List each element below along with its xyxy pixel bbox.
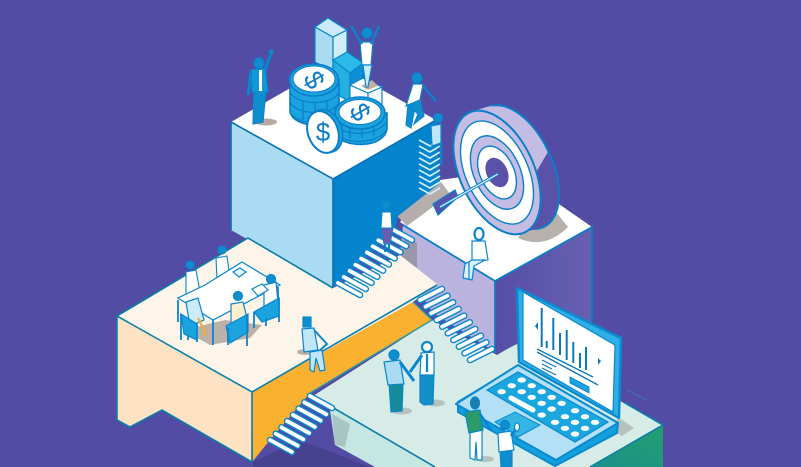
person: waving on top xyxy=(248,50,277,126)
keyboard xyxy=(487,372,608,442)
person: seated on middle cube xyxy=(463,228,488,280)
coin stack: left: $ xyxy=(297,66,331,94)
person: right at table xyxy=(252,274,279,328)
isometric illustration xyxy=(116,17,664,467)
laptop xyxy=(456,288,634,466)
shadow below lower stairs xyxy=(253,440,370,467)
ladder on blue cube xyxy=(419,140,440,194)
person: climbing top edge xyxy=(406,73,436,128)
coin stack: right: $ xyxy=(343,98,377,126)
stairs: upper xyxy=(338,228,412,295)
person: handshake right xyxy=(410,342,445,406)
person: seated on platform edge xyxy=(297,317,327,372)
panel: green side face xyxy=(591,426,663,467)
meeting table group xyxy=(178,246,280,346)
keys xyxy=(498,377,599,437)
trackpad xyxy=(495,412,540,437)
coin standing: $ xyxy=(316,117,331,147)
person: top at table xyxy=(216,246,230,280)
bar: tall xyxy=(315,18,347,72)
person: woman on stairs xyxy=(381,201,393,252)
person: front centre at table xyxy=(226,292,248,346)
space bar xyxy=(511,398,533,410)
table xyxy=(178,262,280,345)
screen text lines and button xyxy=(535,322,601,393)
screen bar chart xyxy=(537,308,598,385)
stairs: middle xyxy=(420,289,492,360)
target xyxy=(452,104,560,236)
person: white shirt pointing xyxy=(498,420,520,467)
person: cheering woman xyxy=(351,26,379,87)
coin standing xyxy=(301,105,348,158)
person: front left at table xyxy=(181,298,205,342)
laptop base xyxy=(456,365,618,466)
arrow xyxy=(433,174,498,215)
panel: meeting platform xyxy=(117,238,437,462)
coin stack: right xyxy=(335,97,387,144)
person: far left at table xyxy=(186,261,200,296)
coin stack: left xyxy=(290,64,339,125)
bar: medium xyxy=(333,52,363,102)
laptop shadow xyxy=(612,417,634,436)
person: handshake left xyxy=(384,350,414,414)
panel: mint floor xyxy=(313,320,663,467)
laptop screen xyxy=(517,288,621,418)
table shadow xyxy=(183,320,262,345)
stairs: lower xyxy=(270,396,332,452)
box under woman xyxy=(350,78,382,112)
panel: top blue cube xyxy=(231,63,440,288)
person: on ladder xyxy=(431,114,442,165)
person: green sweater xyxy=(465,397,494,462)
panel: middle cube xyxy=(397,170,592,354)
